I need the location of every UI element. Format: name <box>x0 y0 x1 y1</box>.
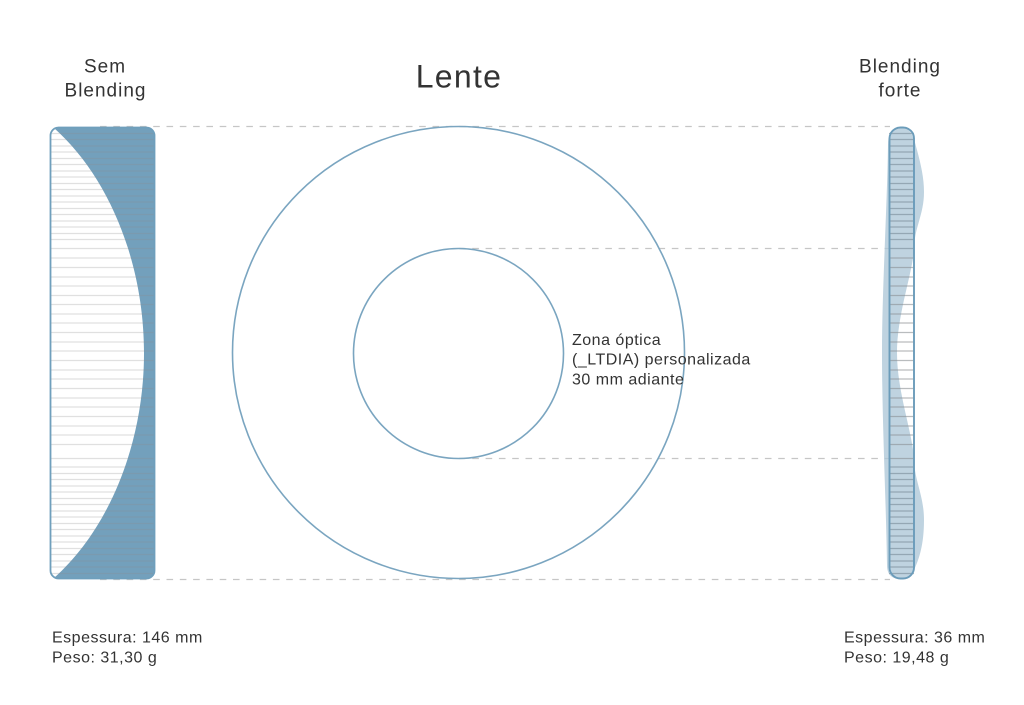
lens body fill <box>54 128 154 578</box>
panel: front view of lens with optical zone <box>232 126 684 578</box>
stats: Sem Blending: Peso: 31,30 g <box>52 650 157 666</box>
horizontal measure lines: dense bottom <box>889 467 914 574</box>
stats: Sem Blending: Espessura: 146 mm <box>52 630 203 646</box>
outer lens circle <box>232 126 684 578</box>
annotation: optical zone: (_LTDIA) personalizada <box>572 352 751 368</box>
title: Lente: Lente <box>416 58 502 94</box>
heading: Blending forte: forte <box>878 80 922 102</box>
horizontal measure lines: sparse middle <box>51 258 154 458</box>
horizontal measure lines: sparse middle <box>889 258 914 458</box>
stats: Sem Blending <box>52 630 203 666</box>
stats: Blending forte: Espessura: 36 mm <box>844 630 985 646</box>
heading: Sem Blending <box>65 56 146 102</box>
blended lens profile <box>882 127 924 579</box>
horizontal measure lines: dense top <box>889 134 914 248</box>
panel: lens cross-section with strong blending <box>882 127 924 579</box>
heading: Sem Blending: Sem <box>84 56 126 78</box>
inner optical zone circle <box>354 248 564 458</box>
annotation: optical zone: Zona óptica <box>572 332 661 349</box>
heading: Blending forte: Blending <box>859 56 941 78</box>
annotation: optical zone <box>572 332 751 388</box>
panel: lens cross-section without blending <box>50 128 154 578</box>
horizontal measure lines: dense top <box>51 134 154 248</box>
heading: Blending forte <box>859 56 941 102</box>
stats: Blending forte: Peso: 19,48 g <box>844 650 949 666</box>
stats: Blending forte <box>844 630 985 666</box>
lens outline <box>890 128 914 578</box>
heading: Sem Blending: Blending <box>65 80 146 102</box>
lens outline <box>50 128 154 578</box>
horizontal measure lines: dense bottom <box>51 467 154 574</box>
annotation: optical zone: 30 mm adiante <box>572 372 684 388</box>
